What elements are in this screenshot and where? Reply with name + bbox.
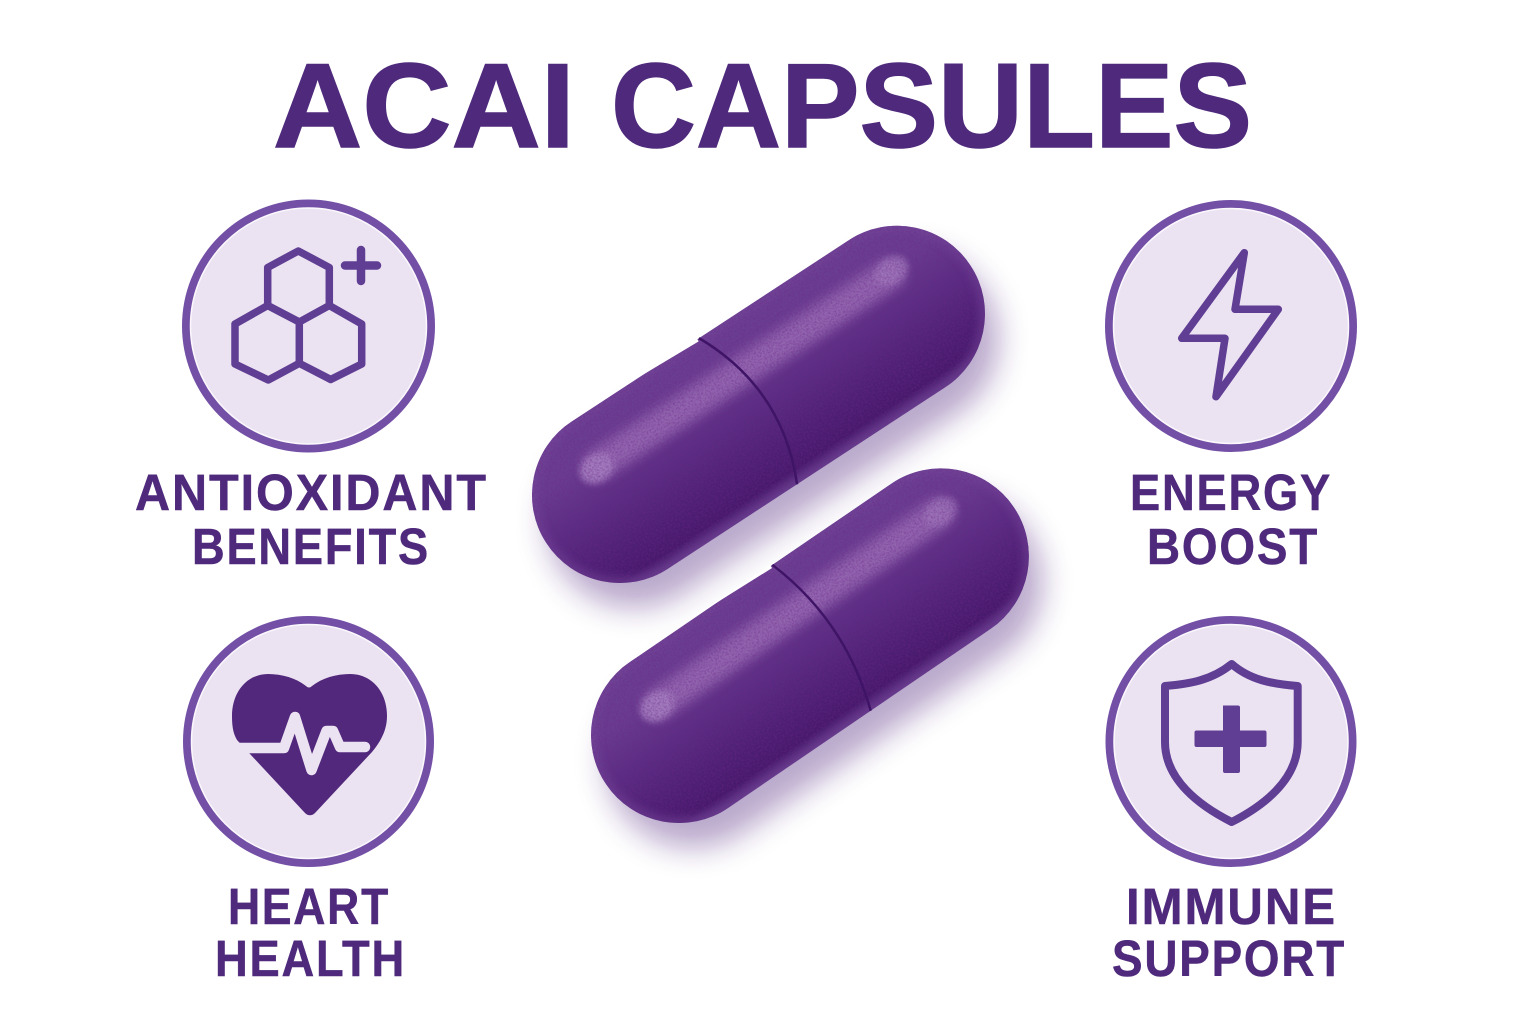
illustration: two capsules (528, 226, 1061, 866)
title (273, 39, 1252, 173)
panel: antioxidant benefits (135, 204, 488, 575)
title: ACAI (273, 39, 575, 173)
icon: heart badge (187, 620, 430, 863)
title: CAPSULES (611, 39, 1252, 173)
infographic canvas (136, 62, 1357, 977)
panel: energy boost (1109, 204, 1353, 575)
label: heart health: HEALTH (215, 930, 406, 987)
label: energy boost (1130, 464, 1332, 575)
capsule shadows (512, 217, 1077, 882)
icon: energy badge (1109, 204, 1353, 448)
label: heart health: HEART (228, 878, 390, 935)
panel: heart health (187, 620, 430, 987)
label: immune support: SUPPORT (1112, 930, 1346, 987)
panel: immune support (1110, 620, 1352, 987)
label: antioxidant benefits: BENEFITS (192, 518, 430, 575)
label: immune support: IMMUNE (1126, 878, 1337, 935)
label: energy boost: ENERGY (1130, 464, 1332, 521)
seam (699, 326, 814, 485)
label: immune support (1112, 878, 1346, 987)
label: heart health (215, 878, 406, 987)
upper capsule (532, 226, 985, 583)
label: antioxidant benefits: ANTIOXIDANT (135, 464, 488, 521)
seam (771, 557, 883, 711)
lower capsule (591, 468, 1029, 823)
icon: antioxidant badge (186, 204, 431, 448)
label: antioxidant benefits (135, 464, 488, 575)
label: energy boost: BOOST (1147, 518, 1319, 575)
icon: immune badge (1110, 620, 1352, 863)
